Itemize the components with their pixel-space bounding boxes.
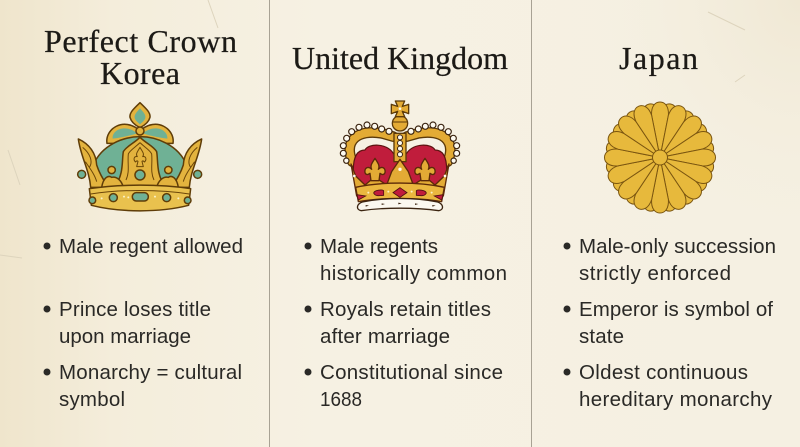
icon: red and gold royal crown	[340, 101, 460, 211]
bullet list: United Kingdom: Constitutional since	[320, 361, 503, 384]
bullet list: Korea	[44, 235, 243, 411]
icon: green and gold crown	[78, 103, 202, 211]
bullet list: Korea: upon marriage	[59, 325, 191, 348]
heading: United Kingdom: United Kingdom	[292, 40, 508, 76]
bullet list: Japan: Oldest continuous	[579, 361, 748, 384]
bullet list: United Kingdom: Royals retain titles	[320, 298, 491, 321]
bullet list: United Kingdom	[304, 235, 507, 411]
bullet list: Japan: strictly enforced	[579, 262, 731, 285]
bullet list: Korea: Male regent allowed	[59, 235, 243, 258]
bullet list: Korea: Prince loses title	[59, 298, 211, 321]
bullet list: Korea: symbol	[59, 388, 125, 411]
bullet list: Japan	[564, 235, 776, 411]
bullet list: United Kingdom: after marriage	[320, 325, 450, 348]
bullet list: Japan: state	[579, 325, 624, 348]
panel: Perfect Crown Korea	[44, 23, 243, 411]
heading: Perfect Crown Korea: Korea	[100, 55, 180, 91]
heading: Perfect Crown Korea	[44, 23, 237, 91]
bullet list: United Kingdom: Male regents	[320, 235, 438, 258]
bullet list: Korea: Monarchy = cultural	[59, 361, 242, 384]
bullet list: Japan: hereditary monarchy	[579, 388, 773, 411]
panel: Japan	[564, 40, 776, 411]
heading: Perfect Crown Korea: Perfect Crown	[44, 23, 237, 59]
bullet list: United Kingdom: 1688	[320, 388, 362, 411]
icon: chrysanthemum seal	[604, 102, 716, 213]
bullet list: Japan: Male-only succession	[579, 235, 776, 258]
bullet list: United Kingdom: historically common	[320, 262, 507, 285]
heading: Japan: Japan	[619, 40, 698, 76]
panel: United Kingdom	[292, 40, 508, 411]
bullet list: Japan: Emperor is symbol of	[579, 298, 773, 321]
